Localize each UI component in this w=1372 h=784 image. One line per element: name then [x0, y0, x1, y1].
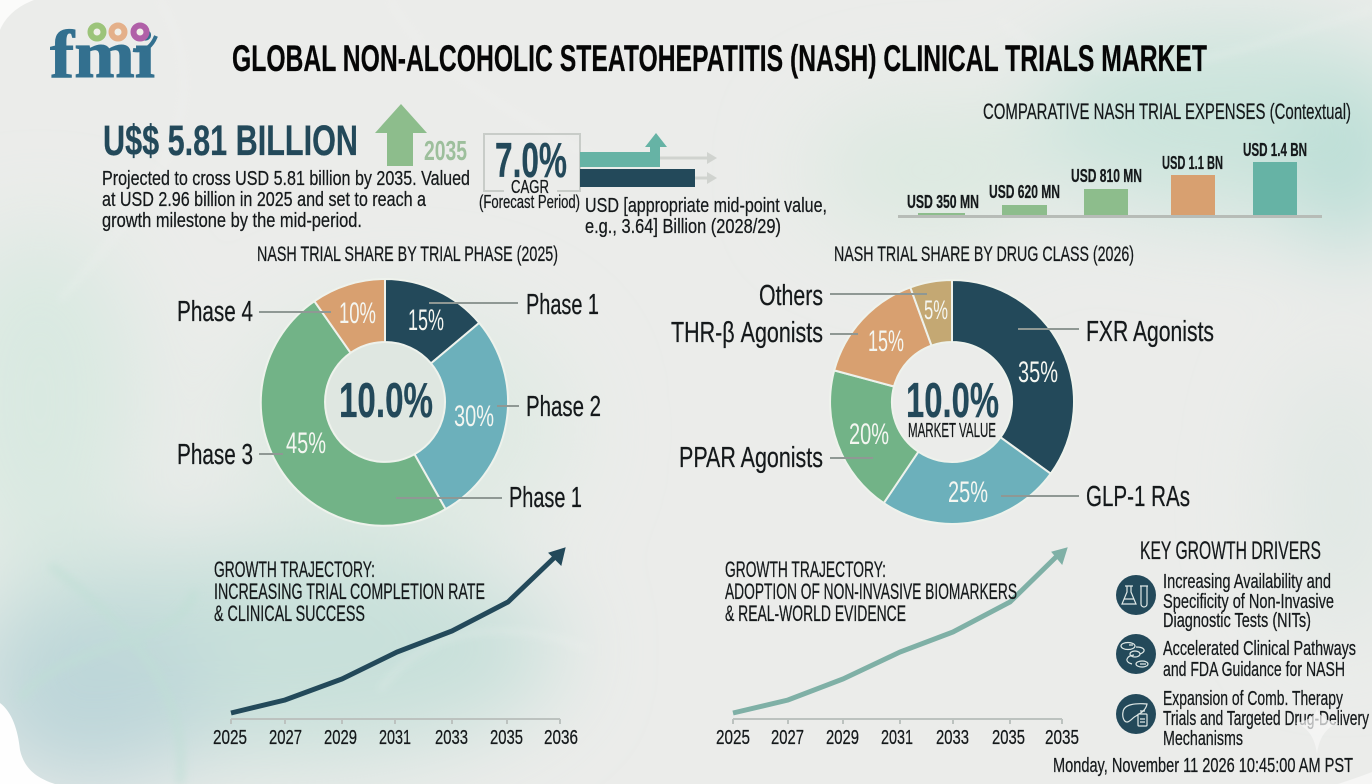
panel: key growth drivers [1116, 537, 1369, 750]
market description [102, 168, 470, 232]
slice values: 5% [924, 295, 948, 325]
driver text: diagnostic tests: Diagnostic Tests (NITs) [1163, 610, 1311, 632]
growth bars and arrows [580, 133, 717, 187]
slice values [286, 297, 494, 460]
chart heading [214, 557, 485, 626]
slice labels: Others [759, 280, 823, 312]
forecast period label: (Forecast Period) [479, 192, 580, 212]
logo: fmi: fmi [50, 16, 155, 92]
donut centre value: MARKET VALUE [908, 420, 996, 442]
CAGR label: CAGR [511, 177, 549, 197]
axis [231, 719, 560, 724]
axis years: 2036 [544, 727, 578, 749]
axis years: 2025 [716, 727, 750, 749]
panel: share by trial phase donut [177, 243, 601, 526]
panel: growth trajectory line chart, biomarkers [716, 548, 1079, 749]
donut heading: NASH TRIAL SHARE BY DRUG CLASS (2026) [834, 243, 1134, 266]
chart heading: GROWTH TRAJECTORY: [214, 557, 375, 582]
axis years: 2025 [213, 727, 247, 749]
slice labels: PPAR Agonists [679, 442, 823, 474]
panel: comparative trial expenses bar chart: USD 1.4 BN [1243, 140, 1307, 160]
chart heading: & REAL-WORLD EVIDENCE [725, 601, 906, 626]
driver text: combination therapy [1163, 688, 1369, 750]
chart heading [725, 557, 1017, 626]
slice labels: Phase 3 [177, 439, 253, 471]
slice values: 35% [1018, 356, 1058, 389]
chart heading: INCREASING TRIAL COMPLETION RATE [214, 579, 485, 604]
icon: up arrow [375, 104, 427, 166]
axis years: 2035 [1045, 727, 1079, 749]
mid-point value note [585, 195, 827, 238]
driver text: combination therapy: Mechanisms [1163, 728, 1243, 750]
market value figure: U$$ 5.81 BILLION [103, 117, 358, 165]
slice labels: Phase 1 [526, 289, 599, 321]
slice values: 20% [849, 418, 889, 451]
panel: comparative trial expenses bar chart: USD 1.1 BN [1162, 153, 1223, 173]
axis years: 2029 [826, 727, 859, 749]
axis years: 2027 [269, 727, 302, 749]
slice values: 10% [339, 297, 376, 330]
slice labels: Phase 2 [526, 391, 601, 423]
slice labels [177, 289, 601, 514]
axis years: 2031 [379, 727, 411, 749]
chart heading: GROWTH TRAJECTORY: [725, 557, 886, 582]
CAGR callout [479, 133, 827, 238]
slice values: 15% [868, 325, 904, 358]
slice values: 45% [286, 427, 326, 460]
growth line with arrow [733, 548, 1067, 713]
driver text: diagnostic tests [1163, 571, 1334, 632]
slice labels: Phase 1 [509, 482, 582, 514]
axis years: 2027 [771, 727, 804, 749]
panel: share by drug class donut [671, 243, 1214, 524]
chart heading: ADOPTION OF NON-INVASIVE BIOMARKERS [725, 579, 1017, 604]
axis years: 2029 [324, 727, 357, 749]
donut slices [830, 280, 1074, 524]
slice labels [671, 280, 1214, 513]
icon: liver and medicine bottle [1116, 694, 1156, 734]
year label 2035: 2035 [424, 135, 467, 166]
panel: comparative trial expenses bar chart [898, 99, 1351, 218]
CAGR figure: 7.0% [495, 134, 567, 188]
axis [733, 719, 1062, 724]
slice values: 15% [408, 304, 444, 337]
mid-point value note: e.g., 3.64] Billion (2028/29) [585, 216, 781, 238]
axis years: 2033 [936, 727, 969, 749]
donut centre value: 10.0% [339, 374, 433, 428]
icon: flask and test tube [1116, 575, 1156, 615]
donut centre value: 10.0% [906, 374, 999, 428]
axis years: 2035 [490, 727, 523, 749]
donut slices [261, 279, 508, 526]
slice labels: GLP-1 RAs [1086, 481, 1190, 513]
slice labels: FXR Agonists [1086, 316, 1214, 348]
sparkle decoration [1295, 708, 1339, 754]
market description: Projected to cross USD 5.81 billion by 2035. Valued [102, 168, 470, 190]
driver text: clinical pathways [1163, 638, 1356, 681]
chart heading: & CLINICAL SUCCESS [214, 601, 365, 626]
axis years: 2031 [881, 727, 913, 749]
panel: comparative trial expenses bar chart: USD 620 MN [989, 182, 1060, 202]
donut heading: NASH TRIAL SHARE BY TRIAL PHASE (2025) [257, 243, 558, 266]
slice values: 25% [948, 476, 988, 509]
market description: at USD 2.96 billion in 2025 and set to reach a [102, 189, 427, 211]
market value callout [102, 104, 470, 232]
slice values [849, 295, 1058, 509]
panel: comparative trial expenses bar chart: USD 350 MN [907, 192, 979, 212]
slice labels: Phase 4 [177, 296, 253, 328]
growth line with arrow [231, 548, 565, 713]
panel: comparative trial expenses bar chart: USD 810 MN [1071, 166, 1142, 186]
axis years [716, 727, 1079, 749]
CAGR box [484, 134, 580, 191]
leader lines [830, 294, 1079, 496]
axis years: 2035 [992, 727, 1025, 749]
market description: growth milestone by the mid-period. [102, 210, 362, 232]
axis years [213, 727, 578, 749]
panel: growth trajectory line chart, trial completion [213, 548, 578, 749]
icon: clinical pathway [1116, 634, 1156, 674]
mid-point value note: USD [appropriate mid-point value, [585, 195, 827, 217]
slice labels: THR-β Agonists [671, 317, 823, 349]
leader lines [259, 303, 519, 498]
donut centre value [906, 374, 999, 442]
axis years: 2033 [435, 727, 468, 749]
slice values: 30% [454, 400, 494, 433]
